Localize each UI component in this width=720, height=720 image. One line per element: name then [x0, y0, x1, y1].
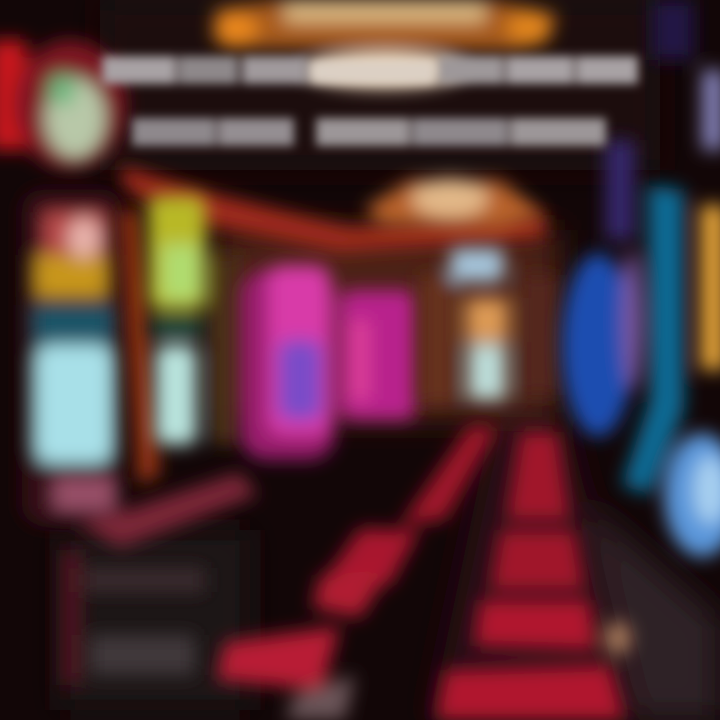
pink slot machines — [240, 265, 416, 460]
chandelier: top — [210, 0, 560, 88]
ceiling lamp — [365, 178, 545, 230]
title line 1 — [102, 56, 638, 84]
orange column — [120, 210, 160, 485]
title bar: blurred heading — [102, 56, 638, 146]
red seats: left row — [216, 425, 498, 720]
slot machine 1 — [22, 190, 258, 548]
right blue machines — [562, 0, 720, 557]
left sign: red ring and round light — [0, 40, 126, 170]
red ceiling beam — [120, 165, 545, 252]
red seats: right row — [435, 432, 631, 720]
centre slot machine — [420, 248, 556, 405]
slot machine 2 — [148, 195, 238, 445]
lower left machine bases — [62, 550, 205, 685]
title line 2 — [132, 118, 606, 146]
